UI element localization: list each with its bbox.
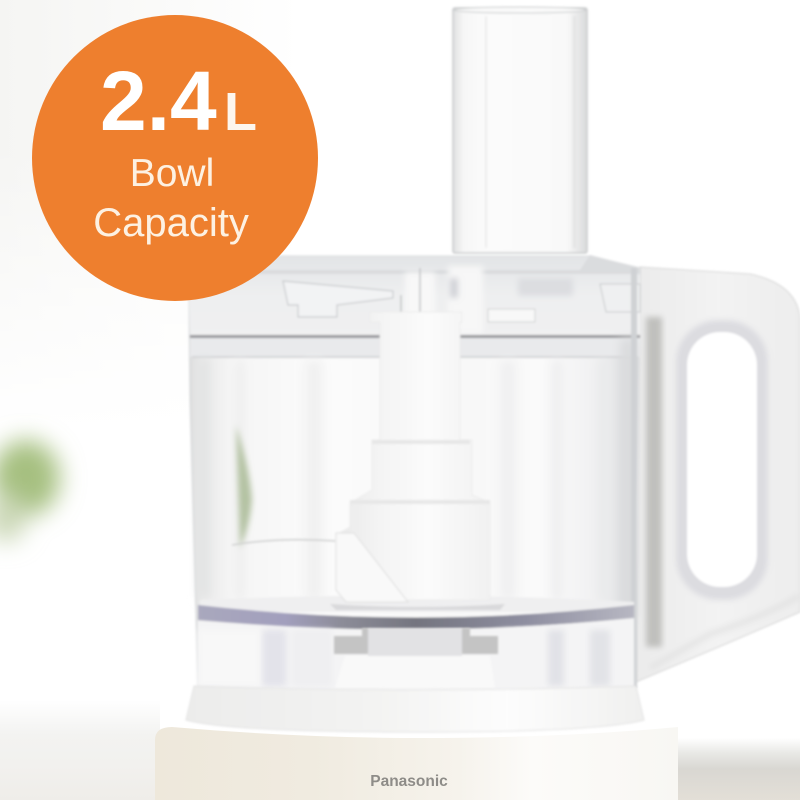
central spindle and blade [330, 312, 505, 688]
bowl floor plate [200, 595, 634, 612]
capacity unit: L [224, 82, 257, 142]
capacity badge [32, 15, 318, 301]
handle [636, 267, 800, 682]
capacity label [93, 152, 249, 245]
lower section [198, 618, 634, 690]
dark vertical bar [646, 317, 662, 647]
base collar [186, 686, 644, 732]
shelf at right [675, 738, 800, 800]
reflection [236, 425, 252, 548]
shelf at left [0, 700, 160, 800]
base [155, 727, 678, 800]
lid upper [189, 256, 640, 335]
coupling [334, 628, 498, 654]
blurred green plant [0, 440, 60, 542]
bowl [189, 255, 640, 690]
brand label: Panasonic [370, 773, 448, 790]
feed tube [453, 7, 587, 253]
lid streaks [405, 266, 573, 334]
lower ring [198, 605, 634, 630]
lid rim [190, 335, 640, 338]
lid details [283, 281, 393, 317]
capacity value: 2.4 [100, 54, 217, 148]
blade [336, 533, 408, 602]
capacity label: Capacity [93, 201, 249, 245]
handle opening [676, 320, 768, 600]
capacity label: Bowl [130, 152, 214, 195]
wall streaks [198, 338, 636, 618]
